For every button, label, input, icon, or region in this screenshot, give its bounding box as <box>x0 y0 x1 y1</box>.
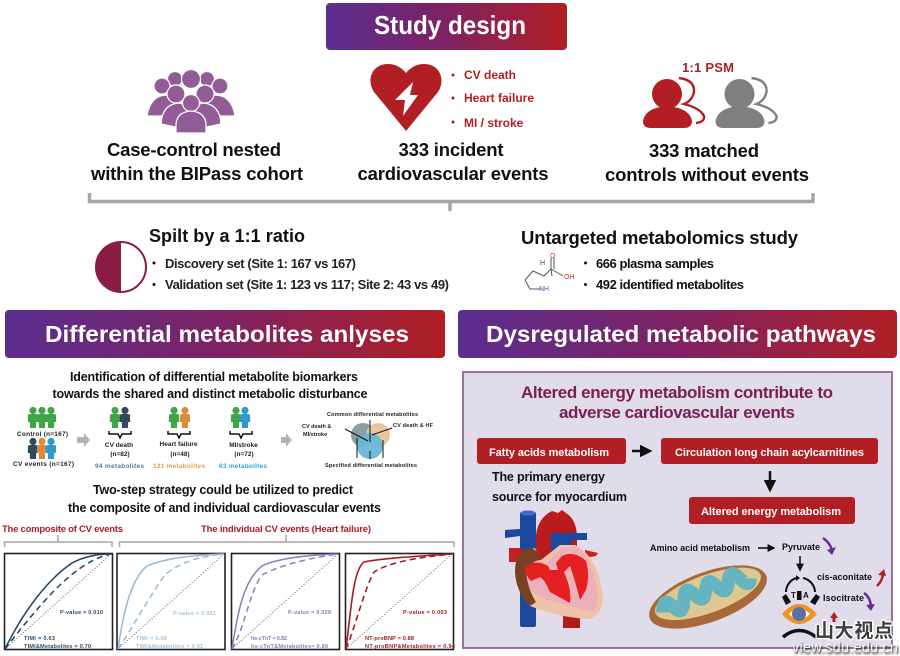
arrow: subgroups to venn <box>281 433 292 447</box>
text: two-step strategy <box>68 483 381 515</box>
title: study design banner <box>326 3 567 50</box>
chart: heart failure ROC, hs-cTnT: hs-cTnT&Metabolites= 0.89 <box>251 644 328 650</box>
venn diagram: MI/stroke <box>303 432 327 438</box>
icon: mitochondrion <box>641 552 775 642</box>
chart: heart failure ROC, hs-cTnT: P-value = 0.029 <box>288 610 331 616</box>
arrow: fatty acids to acylcarnitines <box>632 450 650 452</box>
text: incident events: cardiovascular events <box>358 163 548 184</box>
icon: TCA cycle: A <box>803 591 809 600</box>
panel title: adverse cardiovascular events <box>559 403 795 422</box>
chart: heart failure ROC, TIMI <box>117 554 225 650</box>
text: split ratio: Discovery set (Site 1: 167 vs 167) <box>165 256 356 271</box>
box: fatty acids metabolism: Fatty acids metabolism <box>489 447 609 459</box>
logo: eye watermark <box>782 604 817 637</box>
chart: composite CV events ROC: P-value = 0.010 <box>60 610 103 616</box>
chart: heart failure ROC, TIMI: TIMI&Metabolites = 0.91 <box>136 644 203 650</box>
list: event types: CV death <box>464 68 516 82</box>
text: split ratio: Spilt by a 1:1 ratio <box>149 226 305 246</box>
list: event types: Heart failure <box>464 91 534 105</box>
list: event types: MI / stroke <box>464 116 524 130</box>
chart: composite CV events ROC: TIMI&Metabolites = 0.70 <box>24 644 91 650</box>
subgroup: heart failure: 121 metabolites <box>153 463 205 470</box>
heading: dysregulated pathways banner <box>458 310 897 358</box>
text: primary energy source: source for myocardium <box>492 490 627 504</box>
text: untargeted metabolomics: Untargeted metabolomics study <box>521 227 799 248</box>
brackets over charts <box>4 535 454 547</box>
icon: proline molecule: H <box>540 260 545 267</box>
venn diagram <box>302 412 434 469</box>
arrow: amino acid to pyruvate <box>758 547 774 549</box>
chart: heart failure ROC, NT-proBNP: P-value = 0.003 <box>403 610 447 616</box>
list: event types <box>452 68 534 130</box>
subgroup: heart failure: Heart failure <box>160 441 198 448</box>
subgroup: MI/stroke <box>219 407 267 470</box>
text: case-control: Case-control nested <box>107 139 281 160</box>
cohort groups <box>13 407 74 468</box>
subgroup: CV death: CV death <box>105 442 133 449</box>
text: two-step strategy: the composite of and individual cardiovascular events <box>68 501 381 515</box>
chart: composite CV events ROC: TIMI = 0.63 <box>24 636 55 642</box>
icon: red up arrow <box>877 569 886 586</box>
text: pyruvate: Pyruvate <box>782 542 820 552</box>
text: split ratio: Validation set (Site 1: 123 vs 117; Site 2: 43 vs 49) <box>165 277 449 292</box>
icon: heart with lightning bolt <box>370 64 442 131</box>
chart headings: The composite of CV events <box>2 524 123 535</box>
chart: heart failure ROC, TIMI: TIMI = 0.68 <box>136 636 167 642</box>
watermark: site name: 山大视点 <box>815 620 893 642</box>
text: untargeted metabolomics: 666 plasma samples <box>596 256 714 271</box>
arrow: pyruvate to TCA <box>799 556 801 570</box>
text: untargeted metabolomics: 492 identified metabolites <box>596 277 744 292</box>
icon: gray person pair <box>716 78 777 128</box>
chart: heart failure ROC, NT-proBNP <box>346 554 456 650</box>
heading: differential metabolites banner <box>5 310 445 358</box>
subgroup: CV death: 94 metabolites <box>95 463 144 470</box>
icon: group of people <box>147 70 235 133</box>
watermark: site url: view.sdu.edu.cn <box>792 640 898 656</box>
venn diagram: Specified differential metabolites <box>325 463 417 469</box>
text: identification heading <box>52 370 368 401</box>
arrow: acylcarnitines to altered energy <box>769 471 771 490</box>
box: altered energy metabolism <box>689 497 855 524</box>
heading: dysregulated pathways banner: Dysregulated metabolic pathways <box>486 321 876 347</box>
bracket: study design summary <box>90 193 813 211</box>
icon: purple down arrow <box>864 593 875 611</box>
icon: proline molecule: O <box>550 253 556 260</box>
text: case-control: within the BIPass cohort <box>90 163 303 184</box>
box: altered energy metabolism: Altered energy metabolism <box>701 506 841 518</box>
text: primary energy source: The primary energy <box>492 470 605 484</box>
title: study design banner: Study design <box>374 10 526 40</box>
chart: composite CV events ROC <box>4 554 112 650</box>
text: primary energy source <box>492 470 627 504</box>
text: identification heading: towards the shared and distinct metabolic disturbance <box>52 387 368 401</box>
chart: heart failure ROC, NT-proBNP: NT-proBNP&Metabolites = 0.94 <box>365 644 456 650</box>
chart: heart failure ROC, hs-cTnT: hs-cTnT = 0.82 <box>251 636 287 642</box>
text: split ratio <box>149 226 449 292</box>
chart: heart failure ROC, NT-proBNP: NT-proBNP = 0.88 <box>365 636 414 642</box>
subgroup: MI/stroke: MI/stroke <box>229 442 258 449</box>
subgroup: MI/stroke: 63 metabolites <box>219 463 267 470</box>
text: incident events: 333 incident <box>398 139 504 160</box>
text: case-control <box>90 139 303 184</box>
icon: proline molecule <box>525 253 574 293</box>
watermark: site name: 山大视点 <box>815 620 893 642</box>
text: cis-aconitate: cis-aconitate <box>817 572 872 582</box>
chart: heart failure ROC, TIMI: P-value < 0.001 <box>173 611 216 617</box>
label: 1:1 PSM: 1:1 PSM <box>682 60 734 75</box>
panel title: Altered energy metabolism contribute to <box>521 383 833 402</box>
subgroup: CV death: (n=82) <box>110 451 130 458</box>
text: isocitrate: Isocitrate <box>823 593 864 603</box>
icon: TCA cycle <box>782 575 838 622</box>
icon: proline molecule: OH <box>564 274 574 281</box>
text: incident events <box>358 139 548 184</box>
text: matched controls <box>605 140 809 185</box>
text: untargeted metabolomics <box>521 227 799 292</box>
text: amino acid metabolism: Amino acid metabolism <box>650 543 750 553</box>
text: two-step strategy: Two-step strategy could be utilized to predict <box>93 483 354 497</box>
venn diagram: Common differential metabolites <box>327 412 418 418</box>
panel title <box>521 383 833 422</box>
panel: altered energy metabolism <box>463 372 892 648</box>
cohort groups: Control (n=167) <box>17 431 68 438</box>
heading: differential metabolites banner: Differential metabolites anlyses <box>45 321 409 347</box>
subgroup: heart failure <box>153 407 205 470</box>
box: fatty acids metabolism <box>477 438 626 464</box>
subgroup: heart failure: (n=48) <box>170 451 190 458</box>
icon: TCA cycle: T <box>791 591 796 600</box>
box: circulation long chain acylcarnitines: Circulation long chain acylcarnitines <box>675 447 864 459</box>
icon: proline molecule: NH <box>539 286 549 293</box>
icon: pyruvate down arrow <box>823 538 836 555</box>
icon: anatomical heart <box>505 510 603 628</box>
box: circulation long chain acylcarnitines <box>661 438 878 464</box>
text: matched controls: 333 matched <box>649 140 759 161</box>
icon: half-filled circle <box>96 242 146 292</box>
chart: heart failure ROC, hs-cTnT <box>232 554 340 650</box>
venn diagram: CV death & <box>302 424 331 430</box>
chart headings <box>2 524 371 535</box>
subgroup: CV death <box>95 407 144 470</box>
subgroup: MI/stroke: (n=72) <box>234 451 254 458</box>
cohort groups: CV events (n=167) <box>13 461 74 468</box>
arrow: cohort to subgroups <box>77 433 90 447</box>
text: identification heading: Identification of differential metabolite biomarkers <box>70 370 358 384</box>
icon: red person pair <box>643 78 704 128</box>
chart headings: The individual CV events (Heart failure) <box>201 524 371 535</box>
venn diagram: CV death & HF <box>393 423 434 429</box>
text: matched controls: controls without events <box>605 164 809 185</box>
